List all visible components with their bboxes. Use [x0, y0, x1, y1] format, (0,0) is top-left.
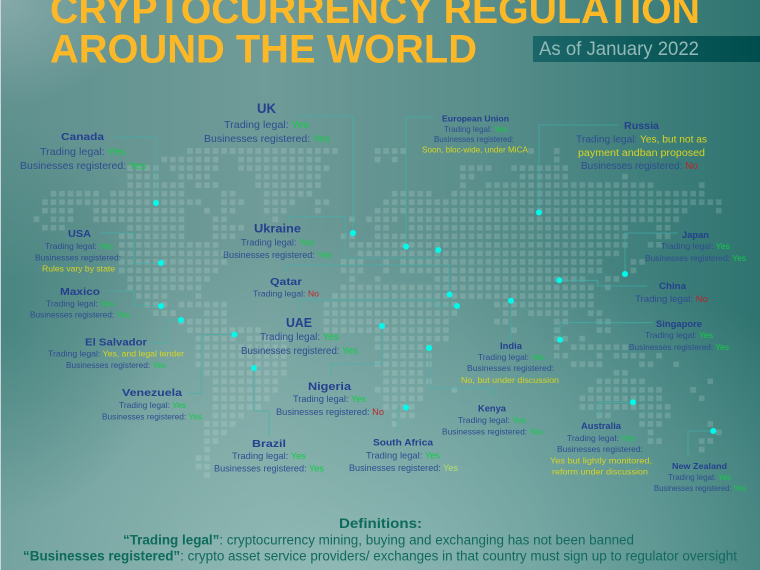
callout: USA: Rules vary by state: [42, 264, 115, 274]
callout: Brazil: [214, 365, 324, 474]
callout: Mexico: Businesses registered: Yes: [30, 310, 130, 320]
callout: USA: Trading legal: Yes: [45, 241, 113, 251]
callout: El Salvador: El Salvador: [85, 336, 147, 348]
callout: El Salvador: [48, 317, 184, 370]
callout: Venezuela: Businesses registered: Yes: [102, 412, 202, 422]
callout: Singapore: Trading legal: Yes: [645, 330, 713, 340]
callout: Venezuela: Venezuela: [122, 387, 182, 399]
callout: Russia: payment andban proposed: [578, 148, 705, 159]
callout: European Union: Soon, bloc-wide, under MiCA: [422, 146, 529, 154]
callout: Qatar: [253, 265, 452, 298]
callout: UAE: Businesses registered: Yes: [241, 346, 358, 357]
callout: India: No, but under discussion: [461, 375, 559, 385]
callout: Kenya: Trading legal: Yes: [458, 415, 526, 425]
callout: Nigeria: Nigeria: [308, 381, 352, 393]
callout: Venezuela: Trading legal: Yes: [119, 400, 186, 410]
callout: Canada: [20, 131, 159, 206]
callout: Nigeria: Trading legal: Yes: [293, 394, 366, 404]
callout: UAE: Trading legal: Yes: [260, 332, 339, 343]
callout: New Zealand: [654, 428, 746, 493]
callout: Russia: Trading legal: Yes, but not as: [576, 134, 707, 146]
callout: Ukraine: [223, 216, 441, 260]
callout: India: Trading legal: Yes: [478, 352, 545, 362]
callout: China: China: [659, 281, 687, 292]
callout: South Africa: South Africa: [373, 438, 434, 448]
dotted world map: [32, 147, 723, 479]
title: [50, 0, 700, 72]
callout: China: [556, 277, 708, 305]
callout: Japan: Trading legal: Yes: [661, 241, 730, 251]
callout: UK: Businesses registered: Yes: [204, 133, 330, 145]
callout: UAE: [241, 300, 460, 357]
callout: Canada: Canada: [61, 131, 104, 143]
callout: Qatar: Qatar: [270, 276, 302, 288]
callout: Kenya: Kenya: [478, 404, 506, 414]
callout: South Africa: Businesses registered: Yes: [349, 463, 458, 473]
callout: UK: UK: [257, 100, 276, 116]
callout: Qatar: Trading legal: No: [253, 288, 319, 298]
callout: Japan: Businesses registered: Yes: [645, 253, 746, 263]
callout: Russia: Russia: [624, 120, 659, 132]
callout: El Salvador: Trading legal: Yes, and legal tender: [48, 348, 184, 358]
callout: Mexico: Trading legal: Yes: [46, 298, 114, 308]
callout: New Zealand: Trading legal: Yes: [668, 473, 731, 482]
callout: Nigeria: Businesses registered: No: [276, 407, 384, 417]
callout: Singapore: Businesses registered: Yes: [629, 342, 729, 352]
callout: European Union: European Union: [442, 114, 509, 124]
callout: Brazil: Trading legal: Yes: [232, 451, 306, 461]
callout: European Union: [403, 114, 529, 250]
callout: Ukraine: Businesses registered: Yes: [223, 250, 332, 260]
callout: China: Trading legal: No: [635, 294, 708, 305]
definitions: “Businesses registered”: crypto asset service providers/ exchanges in that country must sign up to regulator oversight: [23, 548, 737, 564]
callout: Australia: Businesses registered:: [557, 444, 643, 454]
date banner: As of January 2022: [539, 39, 699, 60]
definitions: “Trading legal”: cryptocurrency mining, buying and exchanging has not been banned: [123, 532, 634, 548]
callout: Brazil: Businesses registered: Yes: [214, 464, 324, 474]
callout: Canada: Trading legal: Yes: [40, 146, 125, 158]
callout: India: Businesses registered:: [467, 363, 554, 373]
callout: Singapore: Singapore: [656, 319, 702, 329]
callout: Brazil: Brazil: [252, 438, 286, 450]
callout: Australia: Australia: [581, 421, 621, 431]
callout: Kenya: [426, 345, 543, 436]
callout: South Africa: Trading legal: Yes: [366, 450, 440, 460]
callout: Russia: [536, 120, 707, 216]
title: AROUND THE WORLD: [50, 28, 477, 72]
date banner: [533, 36, 760, 62]
callout: Canada: Businesses registered: Yes: [20, 160, 146, 172]
callout: El Salvador: Businesses registered: Yes: [66, 360, 166, 370]
callout: Japan: Japan: [682, 230, 709, 240]
callout: Japan: [622, 230, 746, 277]
callout: Kenya: Businesses registered: Yes: [442, 426, 543, 436]
callout: European Union: Trading legal: Yes: [444, 125, 507, 134]
callout: India: India: [500, 341, 522, 351]
callout: New Zealand: Businesses registered: Yes: [654, 484, 746, 493]
callout: USA: USA: [68, 228, 91, 240]
callout: Singapore: [557, 319, 729, 352]
callout: Mexico: [30, 286, 164, 320]
callout: South Africa: [349, 404, 458, 473]
callout: UAE: UAE: [286, 316, 312, 330]
callout: India: [461, 298, 559, 385]
callout: New Zealand: New Zealand: [672, 461, 727, 471]
callout: Nigeria: [276, 323, 385, 417]
definitions: [23, 516, 737, 564]
callout: Russia: Businesses registered: No: [581, 161, 698, 172]
callout: UK: Trading legal: Yes: [224, 119, 309, 131]
callout: Mexico: Maxico: [60, 286, 100, 298]
callout: Australia: reform under discussion: [552, 466, 648, 476]
callout: Australia: Yes but lightly monitored,: [550, 456, 652, 466]
callout: Australia: [550, 399, 652, 476]
callout: USA: [35, 228, 164, 274]
callout: Ukraine: Ukraine: [254, 224, 301, 236]
callout: Australia: Trading legal: Yes: [567, 433, 635, 443]
callout: USA: Businesses registered:: [35, 252, 121, 262]
callout: UK: [204, 100, 356, 236]
definitions: Definitions:: [339, 516, 422, 531]
callout: Venezuela: [102, 332, 238, 422]
callout: Ukraine: Trading legal: Yes: [241, 238, 314, 248]
callout: European Union: Businesses registered:: [434, 135, 514, 144]
